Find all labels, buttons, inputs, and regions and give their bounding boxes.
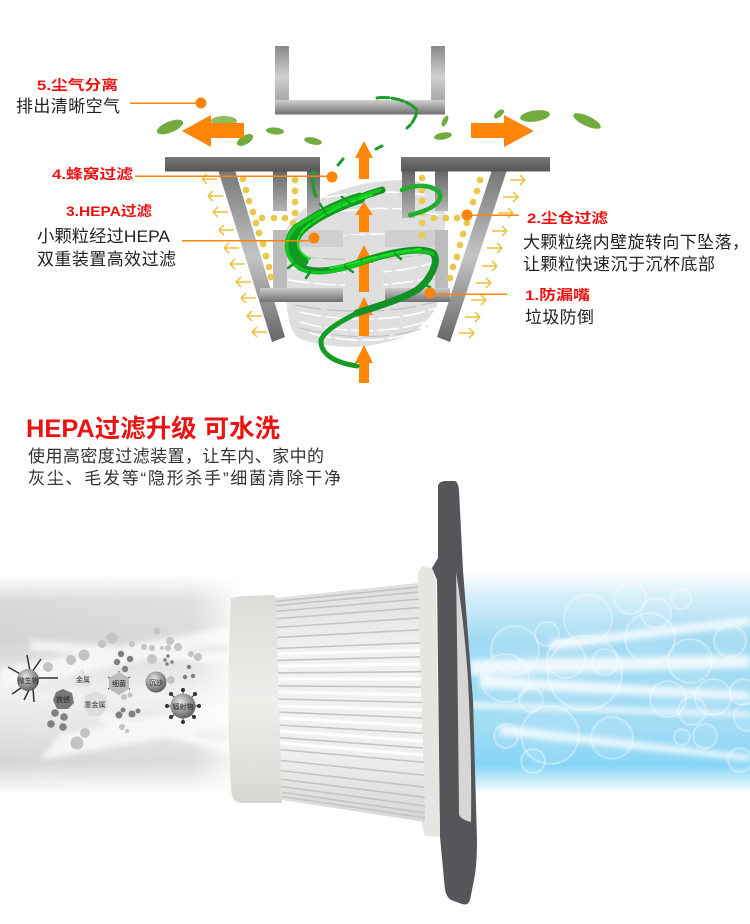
particle: rust (53, 689, 74, 709)
description text: 灰尘、毛发等“隐形杀手”细菌清除干净 (28, 469, 341, 488)
label 5: dust-air separation: 5.尘气分离 (37, 77, 118, 93)
top outlet tube (275, 46, 445, 114)
label 4: honeycomb filter: 4.蜂窝过滤 (52, 166, 133, 182)
green air swirl (287, 98, 440, 366)
green leaves (155, 108, 603, 148)
label 2: dust bin filter: 2.尘仓过滤 (527, 210, 608, 226)
right housing walls (385, 157, 550, 342)
label 1: leak-proof nozzle: 1.防漏嘴 (525, 287, 590, 303)
label 1: leak-proof nozzle: 垃圾防倒 (525, 308, 594, 327)
big orange arrow left (182, 115, 244, 147)
particle: bacteria (108, 671, 130, 695)
callout dots and leader lines (130, 98, 519, 298)
label 3: HEPA filter: 双重装置高效过滤 (37, 250, 176, 269)
particle: sand: 沉沙 (149, 679, 163, 687)
label 5: dust-air separation: 排出清晰空气 (16, 97, 120, 116)
yellow outflow arrows left (202, 174, 267, 337)
particle: heavy metal (83, 691, 108, 716)
description text (28, 446, 341, 488)
heading: HEPA过滤升级 可水洗 (26, 415, 280, 443)
label 1: leak-proof nozzle (525, 287, 594, 327)
label 3: HEPA filter: 3.HEPA过滤 (66, 203, 152, 219)
gasket inner crescent (456, 572, 471, 822)
label 3: HEPA filter (37, 203, 176, 269)
particle: microbe (8, 655, 58, 702)
particle: metal (72, 668, 92, 686)
panel: dirty air haze (0, 581, 230, 788)
particle: metal: 金属 (76, 675, 90, 684)
particle: rust: 铁锈 (56, 695, 70, 704)
label 3: HEPA filter: 小颗粒经过HEPA (37, 227, 171, 246)
yellow dust dots (240, 175, 483, 281)
big orange arrow right (471, 115, 534, 147)
panel: clean air with bubbles (464, 576, 750, 792)
left housing walls (165, 157, 343, 342)
panel: airflow diagram (130, 46, 603, 383)
filter collar (418, 566, 440, 837)
bubbles (481, 582, 750, 773)
label 5: dust-air separation (16, 77, 120, 116)
yellow outflow arrows right (459, 175, 525, 338)
pleated filter media (275, 583, 425, 822)
particle: microbe: 微生物 (18, 676, 38, 685)
orange up arrows (355, 141, 373, 383)
filter gasket (432, 481, 477, 904)
label 2: dust bin filter: 大颗粒绕内壁旋转向下坠落， (523, 233, 749, 252)
tornado dust swirl (280, 180, 445, 347)
particle: radiation (165, 688, 201, 724)
label 2: dust bin filter (523, 210, 749, 274)
particle: bacteria: 细菌 (112, 679, 126, 688)
particles: pollutants (8, 628, 202, 750)
label 2: dust bin filter: 让颗粒快速沉于沉杯底部 (523, 255, 715, 274)
floating grey dots (43, 628, 202, 750)
product: HEPA filter (228, 481, 477, 904)
particle: sand (146, 672, 166, 692)
particle: heavy metal: 重金属 (84, 700, 106, 709)
description text: 使用高密度过滤装置，让车内、家中的 (28, 446, 324, 466)
particle: radiation: 辐射物 (172, 702, 194, 711)
filter end cap (228, 595, 282, 803)
